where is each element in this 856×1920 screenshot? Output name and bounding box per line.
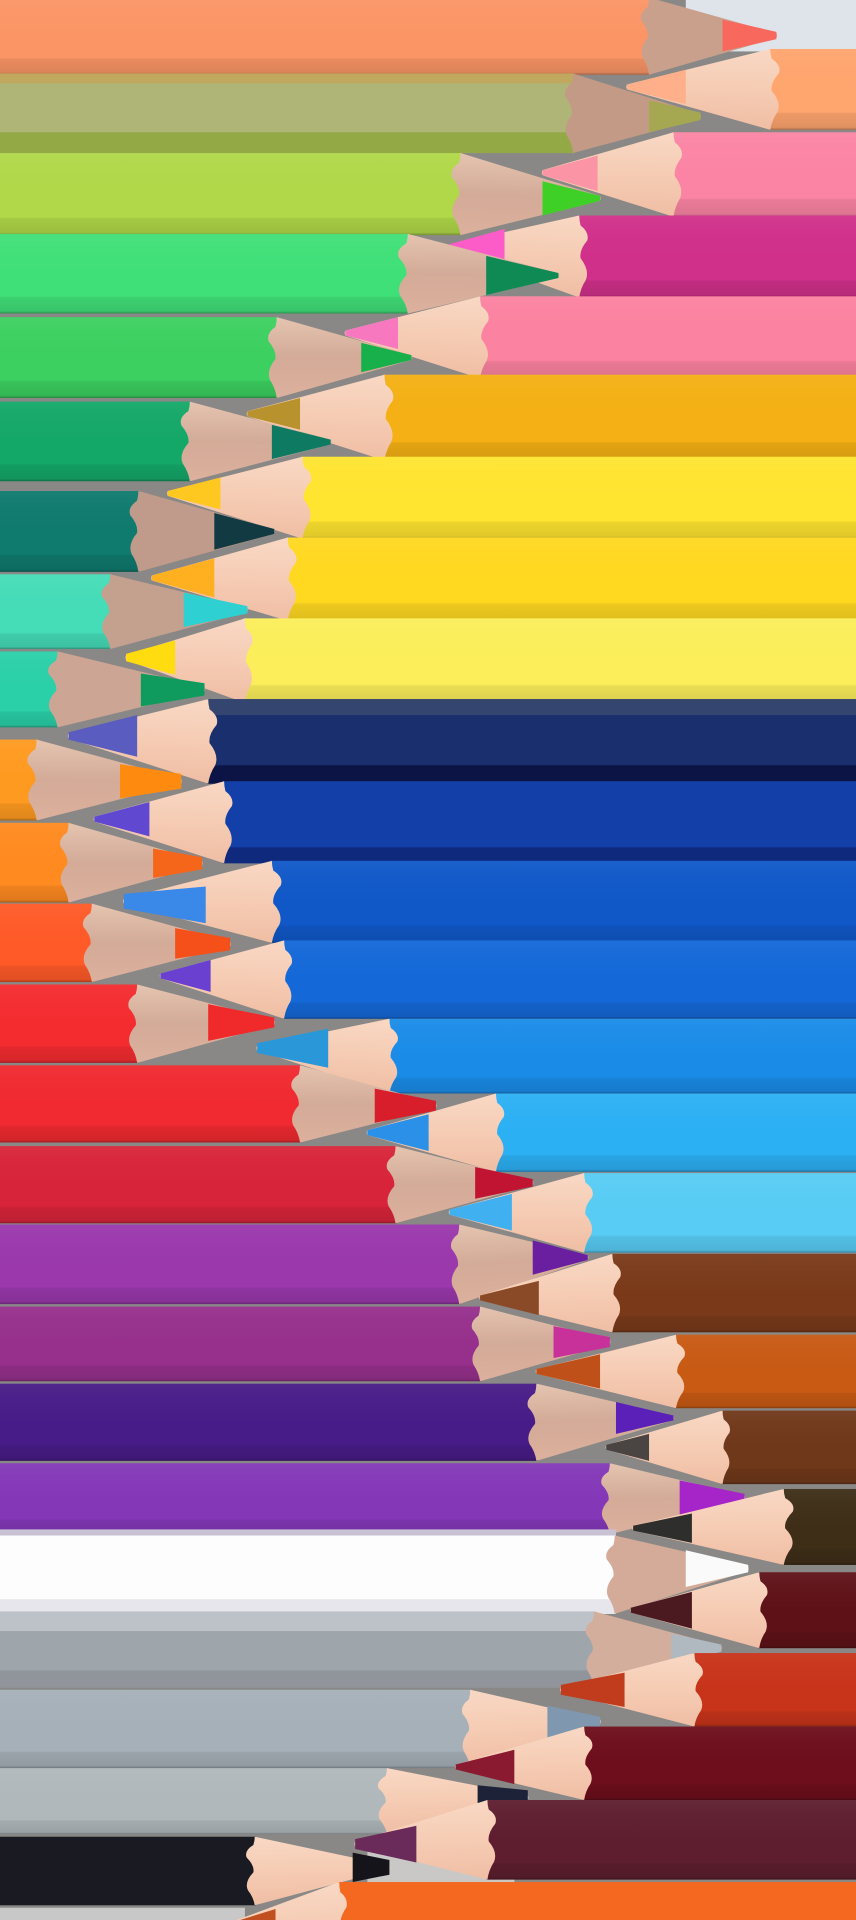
pencil: navy, pointing left <box>68 694 856 784</box>
pencil: partial grey at the bottom edge <box>0 1908 245 1920</box>
pencil: red <box>0 1065 437 1144</box>
pencil: pale cyan, pointing left <box>449 1172 856 1253</box>
pencil: amber, pointing left <box>247 371 856 461</box>
pencil: peach, pointing left <box>626 47 856 130</box>
pencil: scarlet <box>0 983 275 1063</box>
pencil: lime green <box>0 153 601 239</box>
pencil: indigo <box>0 1379 674 1461</box>
pencil: azure blue, pointing left <box>160 937 856 1019</box>
background: pale gap near the bottom <box>367 1837 514 1886</box>
pencil: mulberry, pointing left <box>354 1800 856 1884</box>
pencil: orange at the bottom edge, pointing left <box>220 1882 856 1920</box>
pencil: purple <box>0 1218 588 1305</box>
pencil: black <box>0 1833 390 1906</box>
pencil: slate grey <box>0 1682 601 1769</box>
pencil: dark teal <box>0 491 275 572</box>
pencil: violet <box>0 1462 745 1534</box>
pencil: emerald <box>0 402 331 482</box>
pencil: sky blue, pointing left <box>257 1011 856 1094</box>
pencil: crimson <box>0 1144 533 1223</box>
pencil: white <box>0 1529 749 1614</box>
pencil: silver metallic <box>0 1610 722 1687</box>
pencil: deep orange <box>0 823 203 903</box>
pencil: orange <box>0 740 182 822</box>
pencil: olive gold metallic <box>0 73 701 156</box>
pencil: red orange <box>0 904 231 983</box>
pencil: dark maroon, pointing left <box>630 1572 856 1648</box>
pencil: turquoise <box>0 572 248 649</box>
pencil: spring green <box>0 234 559 315</box>
pencil: umber, pointing left <box>606 1411 856 1484</box>
pencil: salmon orange <box>0 0 777 75</box>
pencil: burnt orange, pointing left <box>536 1335 856 1408</box>
pencil: dark olive brown, pointing left <box>632 1489 856 1566</box>
pencil: golden yellow, pointing left <box>151 536 856 621</box>
pencil: chocolate brown, pointing left <box>479 1254 856 1337</box>
pencil: light blue, pointing left <box>367 1093 856 1172</box>
pencil: wine red, pointing left <box>455 1726 856 1804</box>
pencil: plum <box>0 1305 611 1381</box>
pencil: pale yellow, pointing left <box>126 615 856 703</box>
pencil: rose pink, pointing left <box>345 292 856 379</box>
pencil: pink, pointing left <box>542 130 856 217</box>
pencil: teal green <box>0 651 205 727</box>
pencil: vermilion, pointing left <box>560 1653 856 1727</box>
pencil: magenta, pointing left <box>446 206 856 298</box>
background: pale corner at top right <box>686 0 856 51</box>
pencil: cobalt blue, pointing left <box>123 860 856 943</box>
pencil: light grey <box>0 1764 529 1835</box>
pencil: royal blue, pointing left <box>94 778 856 863</box>
pencil: bright yellow, pointing left <box>167 452 856 539</box>
pencil: green <box>0 317 412 398</box>
